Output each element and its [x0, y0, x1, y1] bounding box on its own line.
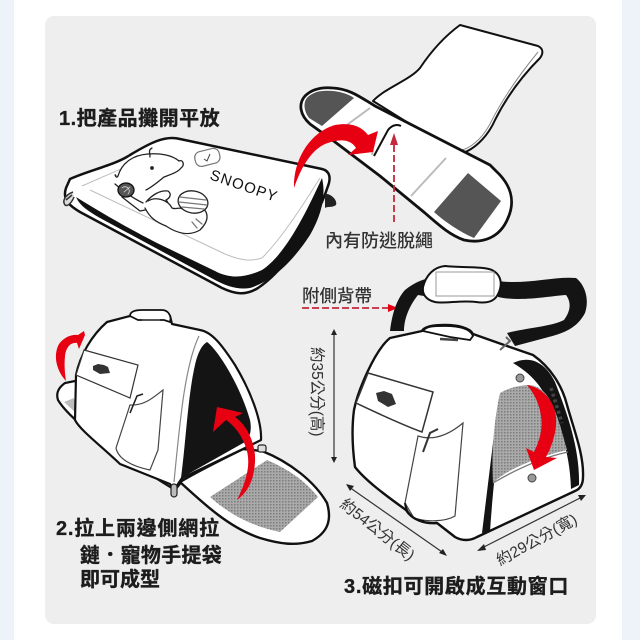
zipper pull	[64, 192, 74, 205]
magnet snaps	[516, 374, 536, 482]
side clip	[258, 445, 266, 452]
handle	[130, 310, 171, 322]
shoulder strap	[390, 277, 436, 331]
red dashed leash pointer	[390, 133, 398, 225]
SNOOPY logo: SNOOPY	[208, 167, 280, 206]
bottom zipper pull	[171, 484, 177, 497]
length dimension: 約54公分(長)	[337, 495, 418, 564]
handle	[423, 326, 473, 340]
length dimension	[337, 484, 447, 564]
bag in step 3	[353, 266, 587, 540]
red arrow small: step 2	[56, 331, 85, 381]
flap pocket	[356, 373, 433, 432]
step 2 heading: 即可成型	[80, 567, 160, 591]
step 2 heading	[56, 516, 222, 591]
step 3 heading: 3.磁扣可開啟成互動窗口	[344, 574, 569, 598]
pocket zipper	[423, 429, 438, 452]
bag body	[75, 311, 261, 490]
step 2 heading: 鏈．寵物手提袋	[80, 543, 222, 567]
red arrow up: step 2	[213, 407, 255, 500]
flap pocket	[76, 350, 138, 398]
inner stitch line	[82, 165, 320, 260]
black zipper band	[76, 178, 324, 289]
strip capsule	[301, 88, 512, 241]
mesh window	[492, 385, 567, 483]
clock badge	[193, 147, 221, 168]
shoulder pad	[423, 266, 501, 303]
brand mark	[93, 364, 110, 374]
leash label: 內有防逃脫繩	[325, 231, 433, 251]
width dimension: 約29公分(寬)	[493, 510, 580, 569]
body	[353, 325, 583, 540]
step 2 heading: 2.拉上兩邊側網拉	[56, 516, 220, 540]
height dimension: 約35公分(高)	[308, 347, 326, 437]
step 1 heading: 1.把產品攤開平放	[59, 106, 220, 130]
red arrow down: step 3	[526, 385, 557, 470]
flat folded bag	[64, 138, 336, 293]
pocket zipper	[130, 394, 143, 413]
window frame	[513, 360, 579, 489]
right side strip	[622, 0, 640, 640]
upper flap	[373, 25, 542, 154]
dark band right	[434, 173, 501, 238]
side zipper	[551, 388, 562, 423]
dark end left	[304, 91, 354, 126]
brand mark	[376, 391, 396, 407]
opening trim	[174, 336, 199, 482]
snoopy drawing	[115, 148, 210, 233]
slot	[374, 125, 401, 156]
strap label: 附側背帶	[302, 286, 372, 306]
width dimension	[477, 495, 586, 569]
side tab	[325, 194, 336, 208]
red dashed strap pointer	[302, 304, 398, 312]
fold lines	[340, 108, 446, 196]
inner flap line	[493, 452, 568, 483]
side pocket	[405, 423, 463, 521]
left side strip	[0, 0, 14, 640]
height dimension	[308, 329, 337, 463]
black opening	[181, 342, 251, 478]
side pocket	[116, 390, 163, 470]
base flap left	[57, 380, 183, 490]
strap clip	[500, 337, 510, 350]
red arrow: step 1	[294, 124, 378, 188]
unfolded mat	[301, 25, 542, 241]
bag in step 2	[57, 310, 329, 544]
open flap with mesh	[180, 449, 329, 544]
